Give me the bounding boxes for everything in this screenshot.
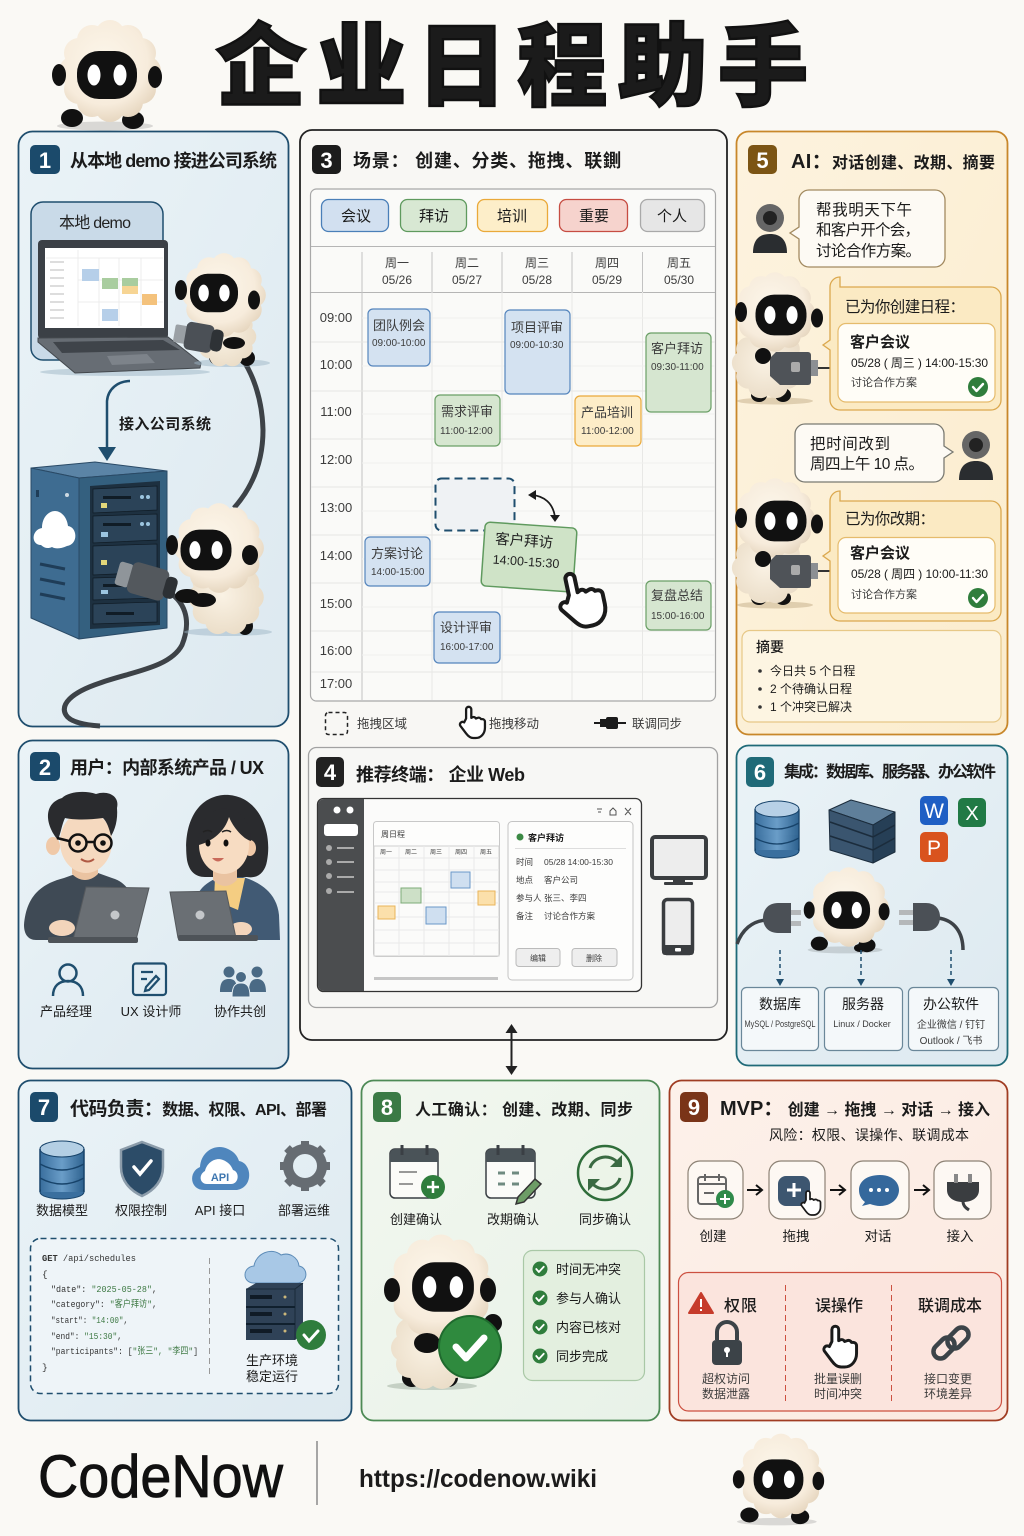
category chips: 个人 [657,208,687,225]
card: database: MySQL / PostgreSQL [744,1019,816,1029]
risk details: 批量误删 [814,1371,862,1386]
role labels: UX 设计师 [121,1004,181,1019]
icon: production server [245,1251,326,1350]
illustration: product manager [24,792,149,943]
checklist: 时间无冲突 [556,1262,621,1277]
event: project review: 项目评审 [511,320,563,335]
icon: reschedule confirm [486,1145,541,1204]
local demo tab [31,202,163,360]
web app mockup: 讨论合作方案 [544,911,596,921]
icon: API cloud: API [211,1172,229,1184]
badge 2 [30,752,60,781]
risk subtitle: 风险：权限、误操作、联调成本 [769,1127,969,1143]
bubble: user request: 讨论合作方案。 [816,242,921,260]
heading 9: MVP： 创建 → 拖拽 → 对话 → 接入 [720,1098,990,1120]
card: office software [908,988,998,1050]
event: project review: 09:00-10:30 [510,340,564,351]
badge 7 [30,1092,58,1122]
icon: Excel [958,798,986,827]
panel 7: code responsibility [18,1080,352,1420]
weekday headers: 周五 [667,256,691,270]
code sample: GET /api/schedules [42,1253,136,1264]
heading 7: 代码负责：数据、权限、API、部署 [70,1098,327,1120]
icon: PowerPoint [920,832,948,862]
icon: hand cursor [554,568,609,631]
reply: schedule created [823,277,1001,410]
web app mockup: 周日程 [381,830,405,839]
heading 1: 从本地 demo 接进公司系统 [70,150,277,171]
web app mockup: 张三、李四 [544,893,587,903]
event: plan discussion: 14:00-15:00 [371,567,425,578]
bubble: user request: 和客户开个会， [816,221,920,239]
reply: rescheduled: 05/28 ( 周四 ) 10:00-11:30 [851,567,988,581]
icon labels: 权限控制 [115,1203,167,1218]
step labels [700,1228,974,1244]
arrow: double-headed connector [506,1024,518,1075]
heading 8: 人工确认： 创建、改期、同步 [415,1100,633,1119]
code sample: "participants": ["张三", "李四"] [51,1345,198,1357]
card: database [742,988,818,1050]
icon: collaboration [220,966,266,997]
icon: server [829,800,895,863]
icon: hand [824,1326,857,1367]
badge 3 [312,145,341,174]
code sample: "start": "14:00", [51,1315,128,1326]
badge 7: 7 [38,1095,50,1120]
icon: sheep with plug 1 [732,272,830,404]
weekday headers: 05/30 [664,273,694,287]
web app mockup: 客户公司 [544,875,578,885]
bubble: user request [790,190,945,267]
summary box: 2 个待确认日程 [770,681,852,696]
time labels: 09:00 [320,310,352,325]
code sample: { [42,1269,48,1280]
reply: rescheduled: 讨论合作方案 [851,587,917,601]
bubble: reschedule: 把时间改到 [810,435,890,453]
badge 8 [373,1092,401,1122]
badge 5 [748,145,777,174]
web app mockup: 参与人 [516,893,542,903]
event: retrospective: 15:00-16:00 [651,611,705,622]
footer divider [316,1441,318,1505]
icon: server rack [31,462,167,639]
role labels [40,1004,266,1019]
local demo tab: 本地 demo [59,214,131,232]
role labels: 产品经理 [40,1004,92,1019]
category chips: 重要 [579,208,609,225]
icon labels: 数据模型 [36,1203,88,1218]
event: requirements review: 需求评审 [441,404,493,419]
panel 2: users [18,740,288,1068]
card: server: 服务器 [842,996,884,1012]
reply: rescheduled: 客户会议 [850,544,910,562]
event: plan discussion: 方案讨论 [371,546,423,561]
icon: sheep with check [384,1234,502,1390]
time labels: 15:00 [320,596,352,611]
footer url: https://codenow.wiki [359,1465,597,1493]
icon: chain link [931,1325,971,1361]
dragged card: 客户拜访 [495,531,554,552]
time labels: 10:00 [320,357,352,372]
reply: rescheduled [823,491,1001,621]
web app mockup: 时间 [516,857,533,867]
time labels: 17:00 [320,676,352,691]
step: connect [934,1161,991,1219]
icon: Word: W [924,800,944,823]
icon: product manager [53,964,83,996]
arrow heads [776,979,955,986]
web app mockup [318,798,642,992]
title: 企业日程助手 [216,18,808,118]
icon: Word [920,796,948,825]
legend: 拖拽区域 [357,717,407,731]
arrow: connect to company system [98,381,130,461]
code sample: "category": "客户拜访", [51,1298,157,1310]
step labels: 对话 [864,1229,892,1244]
panel 6: integration [736,746,1008,1066]
label: production: 稳定运行 [246,1369,298,1384]
icon labels [390,1212,631,1227]
icon: Excel: X [965,803,979,825]
summary box: 摘要 [756,639,784,655]
badge 9: 9 [688,1095,700,1120]
web app mockup: 编辑 [530,953,546,963]
step labels: 接入 [946,1228,974,1244]
drop zone [436,478,514,530]
icon: shield [121,1142,163,1196]
plug right with cable [899,903,963,950]
summary box: 今日共 5 个日程 [770,663,855,678]
time labels [320,310,352,691]
dashed arrows [780,950,951,978]
card: server: Linux / Docker [833,1019,891,1029]
icon: sheep plugging into server [113,503,272,636]
badge 5: 5 [756,148,769,173]
event: team meeting: 09:00-10:00 [372,338,426,349]
icon labels [36,1203,330,1218]
card: office software: 企业微信 / 钉钉 [917,1018,985,1031]
time labels: 14:00 [320,548,352,563]
event: team meeting: 团队例会 [373,318,425,333]
badge 9 [680,1092,708,1122]
risk details: 接口变更 [924,1371,972,1386]
web app mockup: 周二 [405,849,417,856]
plug left with cable [737,903,801,944]
illustration: UX designer [170,795,280,941]
heading 4: 推荐终端： 企业 Web [356,764,525,785]
label: production: 生产环境 [246,1353,298,1368]
icon: desktop monitor [652,837,706,885]
icon: sheep with plug 2 [732,478,830,608]
badge 6: 6 [754,760,766,785]
checklist: 参与人确认 [556,1291,621,1306]
category chips: 培训 [497,208,527,225]
badge 1: 1 [39,148,51,173]
badge 1 [30,145,60,174]
icon: rotate arrow [528,490,560,522]
reply: schedule created: 已为你创建日程： [845,298,965,316]
card: server [824,988,902,1050]
panel 9: MVP [670,1080,1008,1420]
event: plan discussion [365,537,430,586]
icon labels: 创建确认 [390,1212,442,1227]
event: client visit: 09:30-11:00 [651,362,704,373]
icon: sheep mascot top [52,20,162,130]
panel 3: scenario [300,130,727,1040]
label: production [246,1353,298,1384]
reply: schedule created: 讨论合作方案 [851,375,917,389]
icon: user right [959,431,993,480]
web app mockup: 地点 [516,875,534,885]
risk headings: 权限 [724,1297,757,1315]
icon: sync confirm [578,1146,632,1200]
web app mockup: 05/28 14:00-15:30 [544,857,613,867]
icon: PowerPoint: P [927,837,941,860]
event: design review: 16:00-17:00 [440,642,494,653]
badge 4 [316,757,344,787]
badge 6 [746,757,774,787]
icon: gear [280,1141,330,1191]
category chips: 拜访 [419,208,449,225]
event: product training: 产品培训 [581,405,633,420]
bubble: reschedule: 周四上午 10 点。 [810,455,924,473]
web app mockup: 删除 [586,953,602,963]
heading 5: AI：对话创建、改期、摘要 [791,151,995,173]
summary box: 1 个冲突已解决 [770,699,852,714]
risk details [702,1371,972,1401]
event: team meeting [368,309,430,366]
risk details: 时间冲突 [814,1386,862,1401]
icon: lock [712,1322,742,1365]
icon: sheep with plug [172,253,270,367]
risk details: 超权访问 [702,1371,750,1386]
icon: user [753,204,787,253]
weekday headers: 05/27 [452,273,482,287]
legend: 联调同步 [632,717,682,731]
weekday headers: 周三 [525,256,549,270]
risk details: 环境差异 [924,1386,972,1401]
time labels: 13:00 [320,500,352,515]
weekday headers: 05/26 [382,273,412,287]
role labels: 协作共创 [214,1004,266,1019]
web app mockup: 周五 [480,849,492,856]
arrow [914,1185,929,1195]
web app mockup: 周四 [455,849,467,856]
heading 2: 用户：内部系统产品 / UX [70,757,264,778]
step labels: 拖拽 [782,1229,810,1244]
heading 3: 场景： 创建、分类、拖拽、联鍘 [353,151,621,171]
badge 4: 4 [324,760,337,785]
card: office software: 办公软件 [923,996,979,1012]
event: requirements review: 11:00-12:00 [440,426,493,437]
event: product training [575,396,641,446]
step: create [688,1161,743,1219]
event: client visit: 客户拜访 [651,341,703,356]
icon: create confirm [390,1145,445,1199]
bubble: reschedule [795,424,953,482]
footer logo: CodeNow [38,1443,284,1510]
event: design review: 设计评审 [440,620,492,635]
dragged card [481,522,577,592]
checklist: 同步完成 [556,1349,608,1364]
web app mockup: 周三 [430,849,442,856]
panel 1: local demo to company system [18,132,288,726]
panel 8: human confirmation [362,1080,660,1420]
code sample: } [42,1362,48,1373]
reply: schedule created: 客户会议 [850,333,910,351]
category chips: 会议 [341,208,371,225]
badge 3: 3 [320,148,333,173]
legend: 拖拽移动 [489,717,539,731]
weekday headers: 周一 [385,256,409,270]
weekday headers: 周四 [595,256,619,270]
icon: warning [689,1293,713,1313]
code and deploy box [30,1238,338,1394]
arrow [830,1185,845,1195]
event: client visit [646,333,711,412]
event: product training: 11:00-12:00 [581,426,634,437]
legend [326,707,682,738]
checklist [524,1250,644,1380]
web app mockup: 备注 [516,911,534,921]
icon: data model [40,1141,84,1199]
risk headings [724,1297,982,1315]
icon labels: 同步确认 [579,1212,631,1227]
time labels: 11:00 [320,404,352,419]
cable [222,342,263,508]
bubble: user request: 帮我明天下午 [816,201,912,219]
time labels: 16:00 [320,643,352,658]
event: retrospective [646,581,711,630]
risk headings: 联调成本 [918,1297,982,1315]
risk headings: 误操作 [815,1297,863,1315]
icon: mobile phone [662,900,694,955]
event: requirements review [435,395,500,446]
category chips [322,200,704,232]
badge 8: 8 [381,1095,393,1120]
code sample: "date": "2025-05-28", [51,1284,157,1295]
panel 5: AI [732,132,1008,734]
card: database: 数据库 [759,996,801,1012]
badge 2: 2 [39,755,51,780]
time labels: 12:00 [320,452,352,467]
reply: schedule created: 05/28 ( 周三 ) 14:00-15:30 [851,356,988,370]
risk details: 数据泄露 [702,1386,750,1401]
icon: database [755,801,799,858]
weekday headers: 05/28 [522,273,552,287]
checklist: 内容已核对 [556,1320,621,1335]
web app mockup: 周一 [380,849,392,856]
panel 4: recommended terminal [308,748,718,1008]
arrow [747,1185,762,1195]
step: chat [851,1161,909,1219]
dragged card: 14:00-15:30 [492,552,560,571]
code sample [42,1253,198,1373]
step: drag [769,1161,825,1219]
reply: rescheduled: 已为你改期： [845,510,935,528]
icon: sheep centre [804,867,890,953]
calendar [310,189,716,701]
event: project review [505,310,570,394]
icon: UX designer [133,964,166,995]
risk box [678,1272,1002,1411]
step labels: 创建 [700,1229,726,1244]
icon labels: 部署运维 [278,1203,330,1218]
icon: API cloud [192,1147,249,1190]
heading 6: 集成：数据库、服务器、办公软件 [784,762,996,781]
icon labels: 改期确认 [487,1212,539,1227]
label: connect: 接入公司系统 [119,415,211,433]
icon labels: API 接口 [195,1203,245,1218]
event: retrospective: 复盘总结 [651,588,703,603]
icon: sheep footer [733,1434,824,1525]
event: design review [434,612,500,663]
icon: laptop [38,240,210,376]
web app mockup: 客户拜访 [528,832,564,843]
summary box [742,630,1001,722]
weekday headers: 周二 [455,256,479,270]
code sample: "end": "15:30", [51,1331,122,1342]
weekday headers [382,256,694,287]
card: office software: Outlook / 飞书 [920,1035,982,1047]
cable bottom [64,590,187,726]
weekday headers: 05/29 [592,273,622,287]
